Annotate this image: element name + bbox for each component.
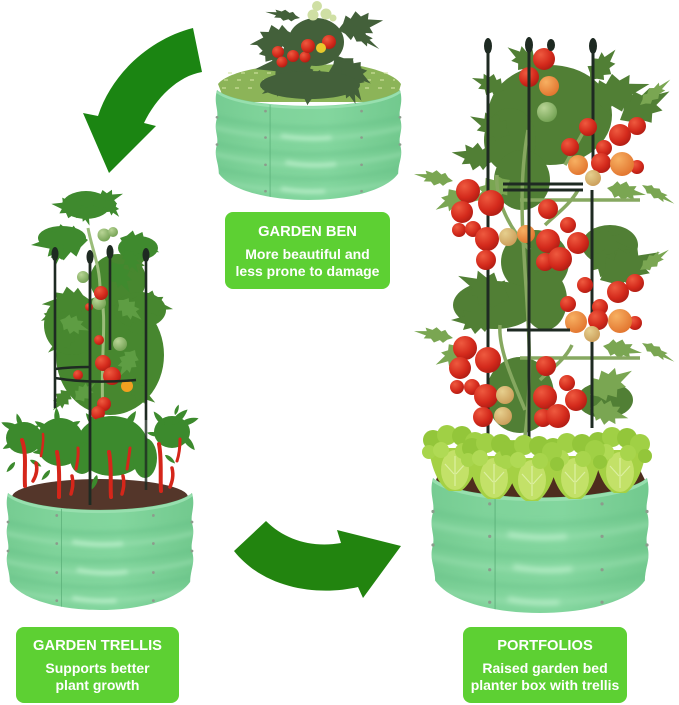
leaves [247, 6, 386, 109]
tomatoes [449, 48, 646, 428]
front trellis post [89, 258, 91, 505]
chili peppers [22, 434, 180, 497]
front trellis post and rings [503, 42, 583, 443]
tomato foliage [37, 250, 176, 416]
caption: garden trellis: plant growth [56, 677, 140, 693]
soil [12, 479, 188, 515]
lettuce [422, 425, 652, 501]
planter: right portfolio [413, 37, 679, 613]
foliage [449, 37, 679, 433]
caption: garden bed: More beautiful and [245, 246, 370, 262]
arrow: bottom curved arrow pointing right [234, 521, 401, 598]
caption: garden trellis [16, 627, 179, 703]
back trellis posts [488, 40, 593, 440]
caption: garden trellis: GARDEN TRELLIS [33, 638, 162, 654]
caption: portfolios: Raised garden bed [482, 660, 608, 676]
top tomato leaves [29, 184, 164, 298]
bed body [212, 90, 405, 200]
back trellis posts and ring [55, 250, 146, 420]
bed body [3, 493, 197, 610]
trellis finials [484, 37, 597, 54]
main stem [88, 228, 104, 420]
stems [497, 120, 640, 436]
soil [436, 470, 645, 499]
grass mound [218, 64, 401, 102]
tomatoes [77, 227, 127, 351]
bed body [428, 478, 652, 613]
caption: garden trellis: Supports better [45, 660, 150, 676]
caption: garden bed: less prone to damage [236, 263, 379, 279]
arrow: top curved arrow pointing down-left [83, 28, 202, 173]
caption: portfolios: planter box with trellis [471, 677, 619, 693]
planter: left garden trellis [0, 184, 200, 610]
caption: portfolios [463, 627, 627, 703]
caption: garden bed: GARDEN BEN [258, 224, 357, 240]
planter: top garden bed with plant [212, 1, 405, 200]
caption: garden bed [225, 212, 390, 289]
caption: portfolios: PORTFOLIOS [497, 638, 593, 654]
trellis finials [52, 245, 150, 264]
pepper foliage [0, 404, 200, 490]
